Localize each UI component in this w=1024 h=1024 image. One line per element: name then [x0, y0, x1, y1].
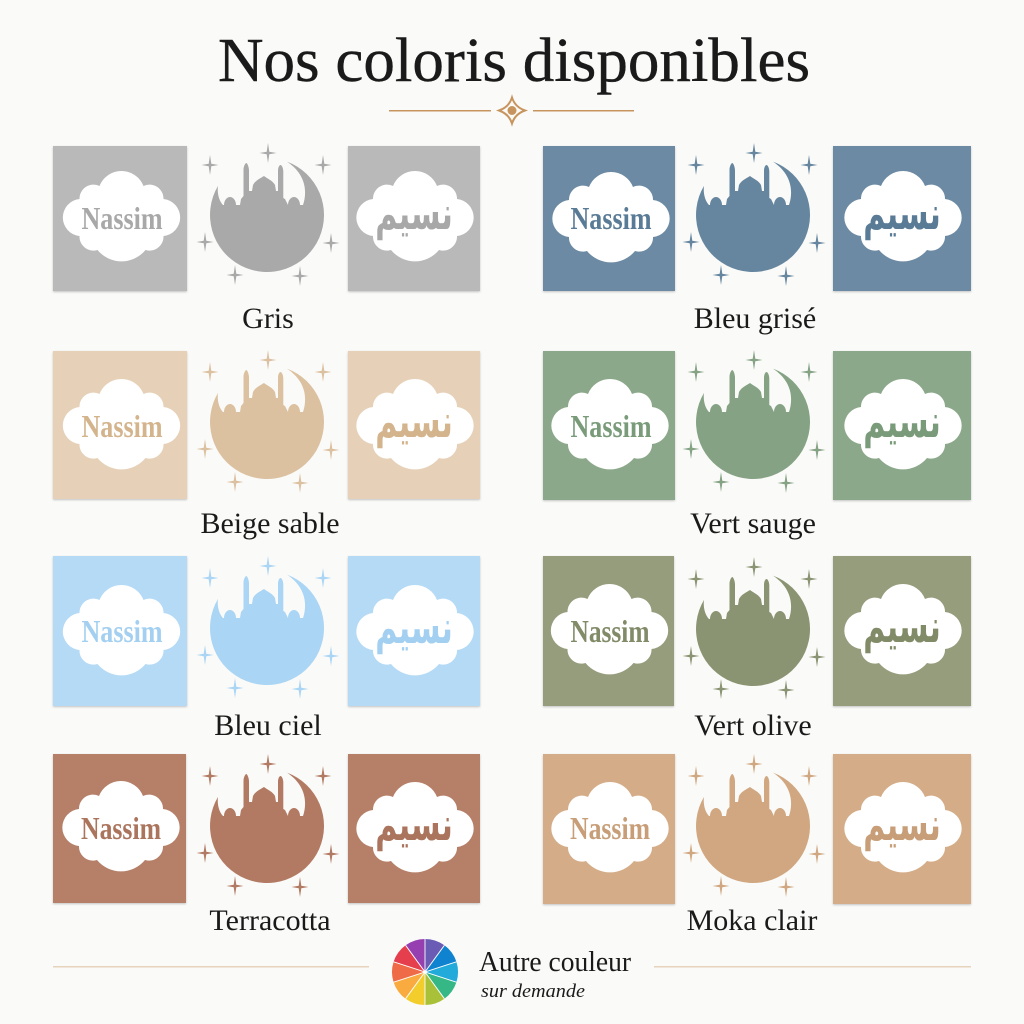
icon: Gris crescent and mosque — [196, 143, 340, 286]
label: Moka clair: Moka clair — [687, 904, 817, 937]
icon: Vert sauge crescent and mosque — [682, 350, 826, 493]
panel: Vert sauge — [543, 350, 971, 540]
icon: colour wheel — [392, 939, 458, 1005]
tile: Terracotta latin name: Nassim — [81, 810, 161, 846]
tile: Moka clair arabic name: نسيم — [863, 799, 941, 852]
tile: Moka clair arabic name — [833, 754, 971, 904]
tile: Vert olive arabic name: نسيم — [863, 601, 941, 654]
label: Vert sauge: Vert sauge — [690, 507, 816, 540]
text: other colour on request — [479, 947, 631, 1002]
tile: Terracotta arabic name: نسيم — [375, 799, 453, 852]
tile: Moka clair latin name: Nassim — [570, 810, 650, 846]
tile: Gris latin name: Nassim — [82, 200, 163, 236]
tile: Vert sauge latin name: Nassim — [570, 408, 652, 444]
tile: Bleu grisé arabic name: نسيم — [863, 188, 941, 241]
label: Bleu ciel: Bleu ciel — [214, 709, 322, 742]
title: Nos coloris disponibles — [218, 27, 810, 95]
label: Terracotta: Terracotta — [209, 904, 331, 937]
tile: Bleu ciel arabic name: نسيم — [375, 602, 453, 655]
panel: Bleu grisé — [543, 143, 971, 335]
footer divider lines — [53, 966, 971, 968]
tile: Bleu grisé arabic name — [833, 146, 971, 291]
tile: Vert olive latin name — [543, 556, 674, 706]
icon: Moka clair crescent and mosque — [682, 754, 826, 897]
icon: Bleu ciel crescent and mosque — [196, 556, 340, 699]
tile: Bleu ciel latin name — [53, 556, 187, 706]
tile: Bleu grisé latin name — [543, 146, 675, 291]
tile: Beige sable arabic name — [348, 351, 480, 499]
text: other colour on request: sur demande — [481, 981, 585, 1002]
panel: Gris — [53, 143, 480, 335]
text: other colour on request: Autre couleur — [479, 947, 631, 978]
label: Beige sable: Beige sable — [200, 507, 340, 540]
tile: Vert sauge arabic name: نسيم — [863, 396, 941, 449]
panel: Vert olive — [543, 556, 971, 742]
icon: Beige sable crescent and mosque — [196, 350, 340, 493]
tile: Terracotta latin name — [53, 754, 186, 903]
tile: Vert olive arabic name — [833, 556, 971, 706]
icon: Vert olive crescent and mosque — [682, 557, 826, 700]
label: Vert olive: Vert olive — [694, 709, 812, 742]
tile: Moka clair latin name — [543, 754, 675, 904]
tile: Bleu ciel arabic name — [348, 556, 480, 706]
panel: Beige sable — [53, 350, 480, 540]
icon: Terracotta crescent and mosque — [196, 754, 340, 897]
tile: Vert sauge arabic name — [833, 351, 971, 500]
title divider with diamond ornament — [389, 98, 634, 124]
tile: Vert olive latin name: Nassim — [570, 613, 650, 649]
tile: Gris latin name — [53, 146, 187, 291]
tile: Terracotta arabic name — [348, 754, 480, 903]
tile: Beige sable latin name: Nassim — [82, 408, 163, 444]
label: Bleu grisé: Bleu grisé — [694, 302, 816, 335]
icon: Bleu grisé crescent and mosque — [682, 143, 826, 286]
tile: Beige sable latin name — [53, 351, 187, 499]
tile: Bleu grisé latin name: Nassim — [570, 200, 652, 236]
tile: Beige sable arabic name: نسيم — [375, 396, 453, 449]
label: Gris: Gris — [242, 302, 294, 335]
tile: Gris arabic name — [348, 146, 480, 291]
panel: Bleu ciel — [53, 556, 480, 742]
panel: Terracotta — [53, 754, 480, 937]
tile: Bleu ciel latin name: Nassim — [82, 613, 163, 649]
panel: Moka clair — [543, 754, 971, 937]
tile: Vert sauge latin name — [543, 351, 675, 500]
tile: Gris arabic name: نسيم — [375, 188, 453, 241]
